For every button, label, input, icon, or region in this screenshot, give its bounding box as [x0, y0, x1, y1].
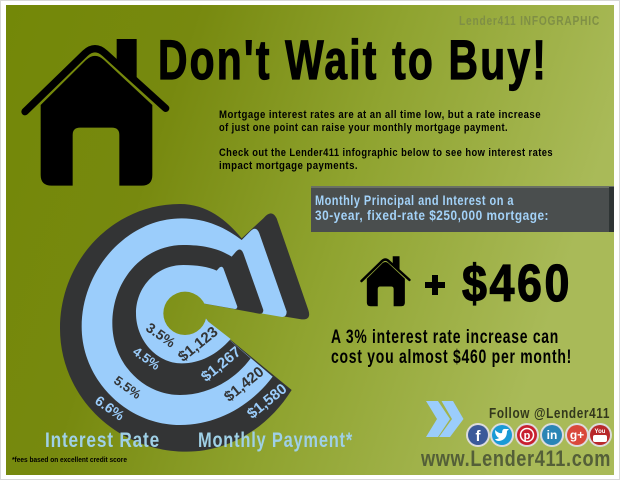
axis label: interest rate: Interest Rate — [45, 429, 160, 452]
icon: large house — [25, 39, 166, 186]
icon: facebook: f — [476, 428, 482, 445]
label: rates: 6.6% — [92, 392, 128, 424]
icon: twitter — [490, 423, 514, 447]
intro text: impact mortgage payments. — [219, 160, 358, 172]
footnote: *fees based on excellent credit score — [12, 457, 127, 464]
label: payments: $1,123 — [175, 323, 221, 366]
icon: facebook — [466, 423, 490, 447]
intro text: Check out the Lender411 infographic below to see how interest rates — [219, 147, 553, 159]
intro text: Mortgage interest rates are at an all time low, but a rate increase — [219, 109, 541, 121]
label: rates — [92, 319, 179, 424]
label: payments: $1,580 — [244, 380, 290, 423]
label: rates: 3.5% — [143, 319, 179, 351]
icon: youtube — [588, 423, 612, 447]
intro text: of just one point can raise your monthly mortgage payment. — [219, 122, 508, 134]
social icons — [466, 423, 612, 447]
icon: small house — [362, 256, 409, 306]
icon: linkedin — [540, 423, 564, 447]
banner: monthly principal and interest: Monthly Principal and Interest on a — [315, 192, 514, 208]
callout text — [331, 327, 572, 368]
intro text — [219, 109, 553, 172]
icon: google plus — [565, 423, 589, 447]
icon: pinterest: p — [524, 430, 531, 442]
label: rates: 5.5% — [111, 373, 144, 402]
amount: $460: $460 — [462, 255, 572, 313]
icon: google plus: g+ — [570, 428, 584, 442]
label: payments: $1,267 — [198, 343, 244, 386]
icon: chevrons — [426, 401, 464, 437]
icon: pinterest — [515, 423, 539, 447]
axis label: monthly payment: Monthly Payment* — [198, 429, 353, 452]
chart: radial spiral of payments — [60, 204, 309, 452]
label: rates: 4.5% — [130, 344, 163, 373]
banner: monthly principal and interest: 30-year, fixed-rate $250,000 mortgage: — [315, 207, 549, 223]
banner: monthly principal and interest — [311, 186, 614, 232]
icon: youtube: You — [595, 429, 606, 435]
icon: linkedin: in — [547, 428, 557, 442]
label: payments: $1,420 — [221, 363, 267, 406]
plus sign — [425, 275, 445, 295]
label: payments — [175, 323, 290, 423]
